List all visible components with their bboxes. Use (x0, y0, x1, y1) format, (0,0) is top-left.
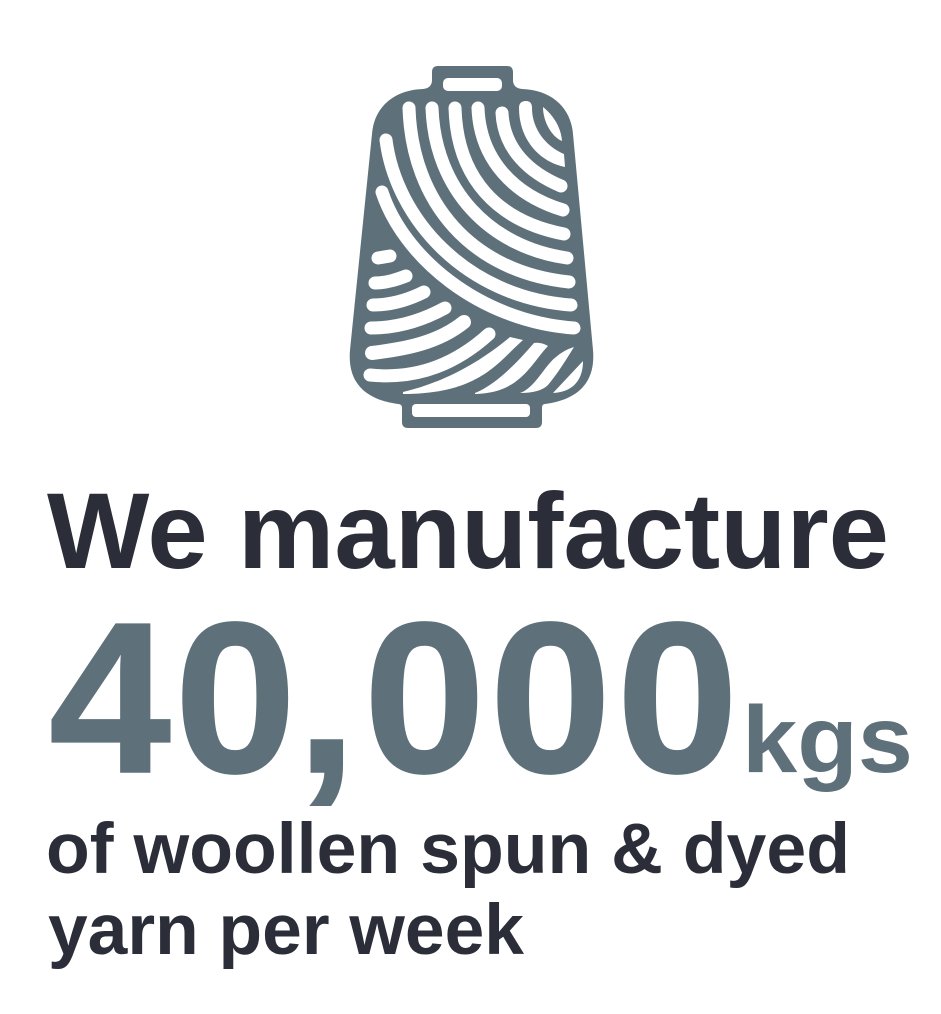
cap and foot openings (412, 78, 530, 417)
upper yarn strands (382, 108, 574, 328)
text: of woollen spun & dyed: of woollen spun & dyed (46, 810, 850, 889)
tapered lower strands (403, 337, 583, 394)
tip strand at top right (543, 107, 562, 141)
icon: yarn cone (350, 66, 593, 428)
short strand with flat end (519, 101, 565, 167)
big number: 40,000: 40,000 (49, 578, 738, 819)
unit: kgs: kgs (742, 687, 913, 793)
heading: We manufacture: We manufacture (47, 470, 889, 591)
cone body (350, 66, 593, 428)
text: yarn per week: yarn per week (48, 891, 525, 970)
lower yarn strands (370, 256, 489, 376)
